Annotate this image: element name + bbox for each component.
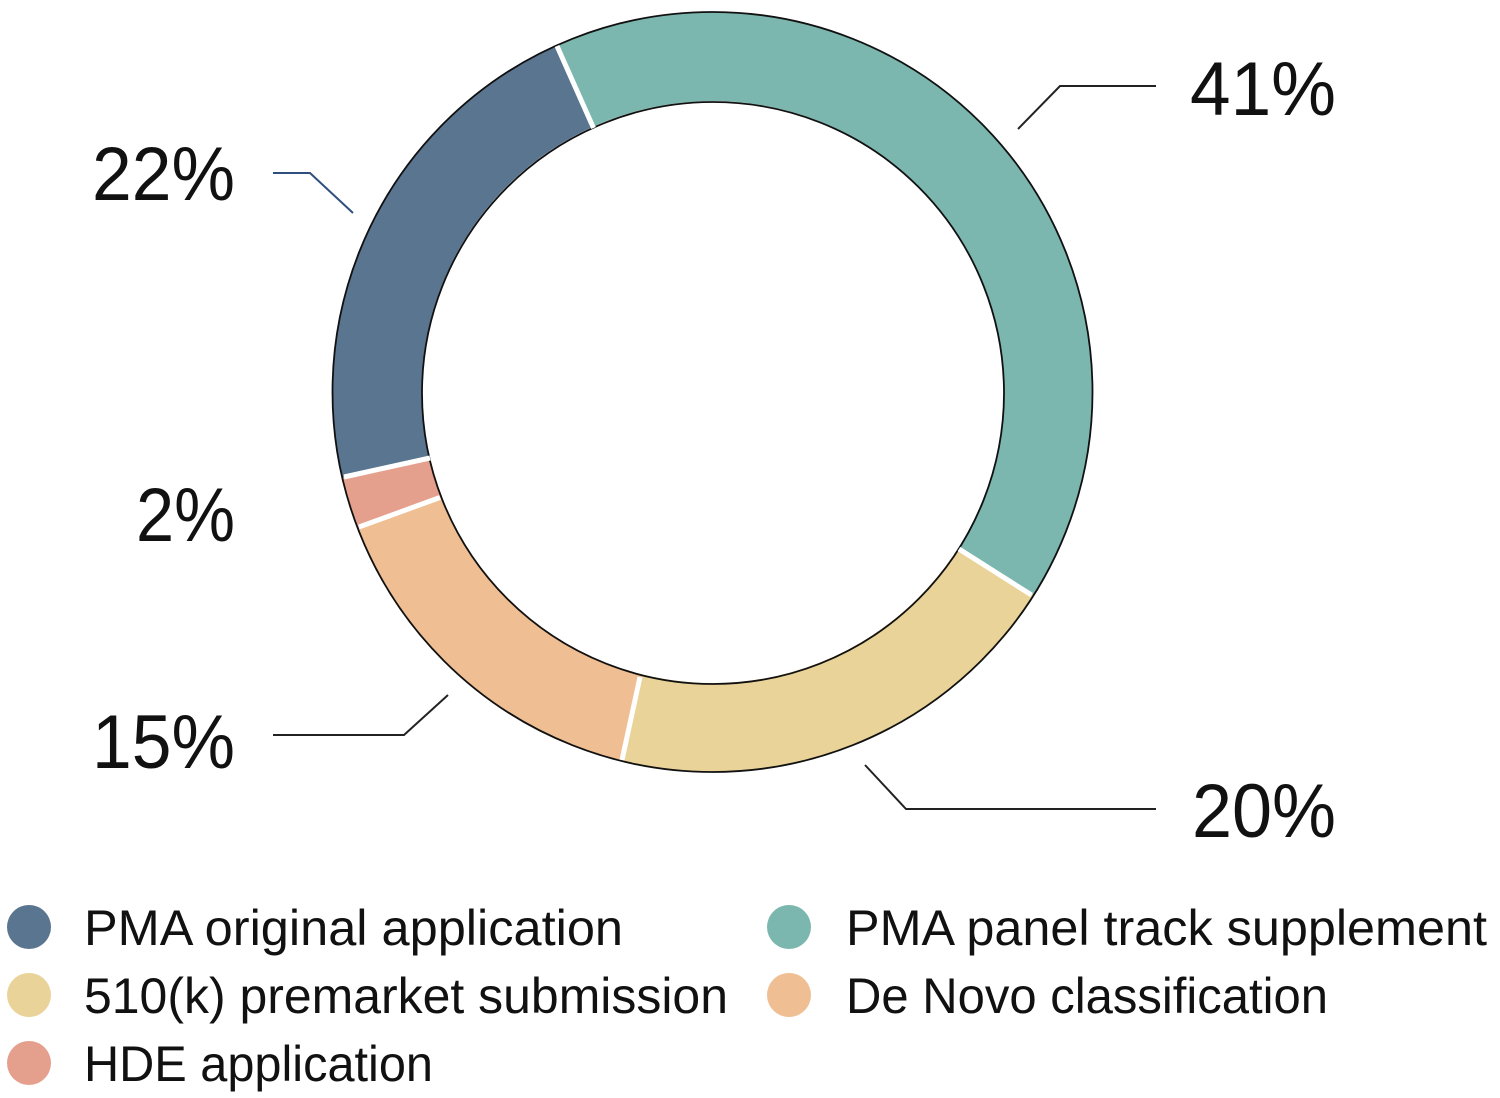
callout: 2%: 2% xyxy=(136,473,235,558)
legend item: HDE application: HDE application xyxy=(84,1036,433,1092)
callout: 15% xyxy=(92,695,448,785)
callout: 22% xyxy=(92,132,353,217)
legend xyxy=(7,900,1487,1092)
segment: PMA original application 22% xyxy=(332,45,594,478)
legend item: PMA original application: PMA original application xyxy=(84,900,623,956)
callout: 20% xyxy=(865,765,1336,854)
legend item: PMA panel track supplement: PMA panel track supplement xyxy=(846,900,1487,956)
segment: PMA panel track supplement 41% xyxy=(558,12,1093,595)
callout: 41%: 41% xyxy=(1190,47,1336,132)
legend item: De Novo classification: De Novo classification xyxy=(846,968,1328,1024)
callout: 22%: 22% xyxy=(92,132,235,217)
donut chart xyxy=(332,12,1093,772)
segment: 510(k) premarket submission 20% xyxy=(621,548,1034,772)
segment: HDE application 2% xyxy=(342,458,441,529)
legend item: 510(k) premarket submission: 510(k) premarket submission xyxy=(84,968,728,1024)
callout: 15%: 15% xyxy=(92,700,235,785)
callout: 20%: 20% xyxy=(1192,769,1336,854)
callout: 41% xyxy=(1018,47,1336,132)
segment: De Novo classification 15% xyxy=(358,497,642,761)
